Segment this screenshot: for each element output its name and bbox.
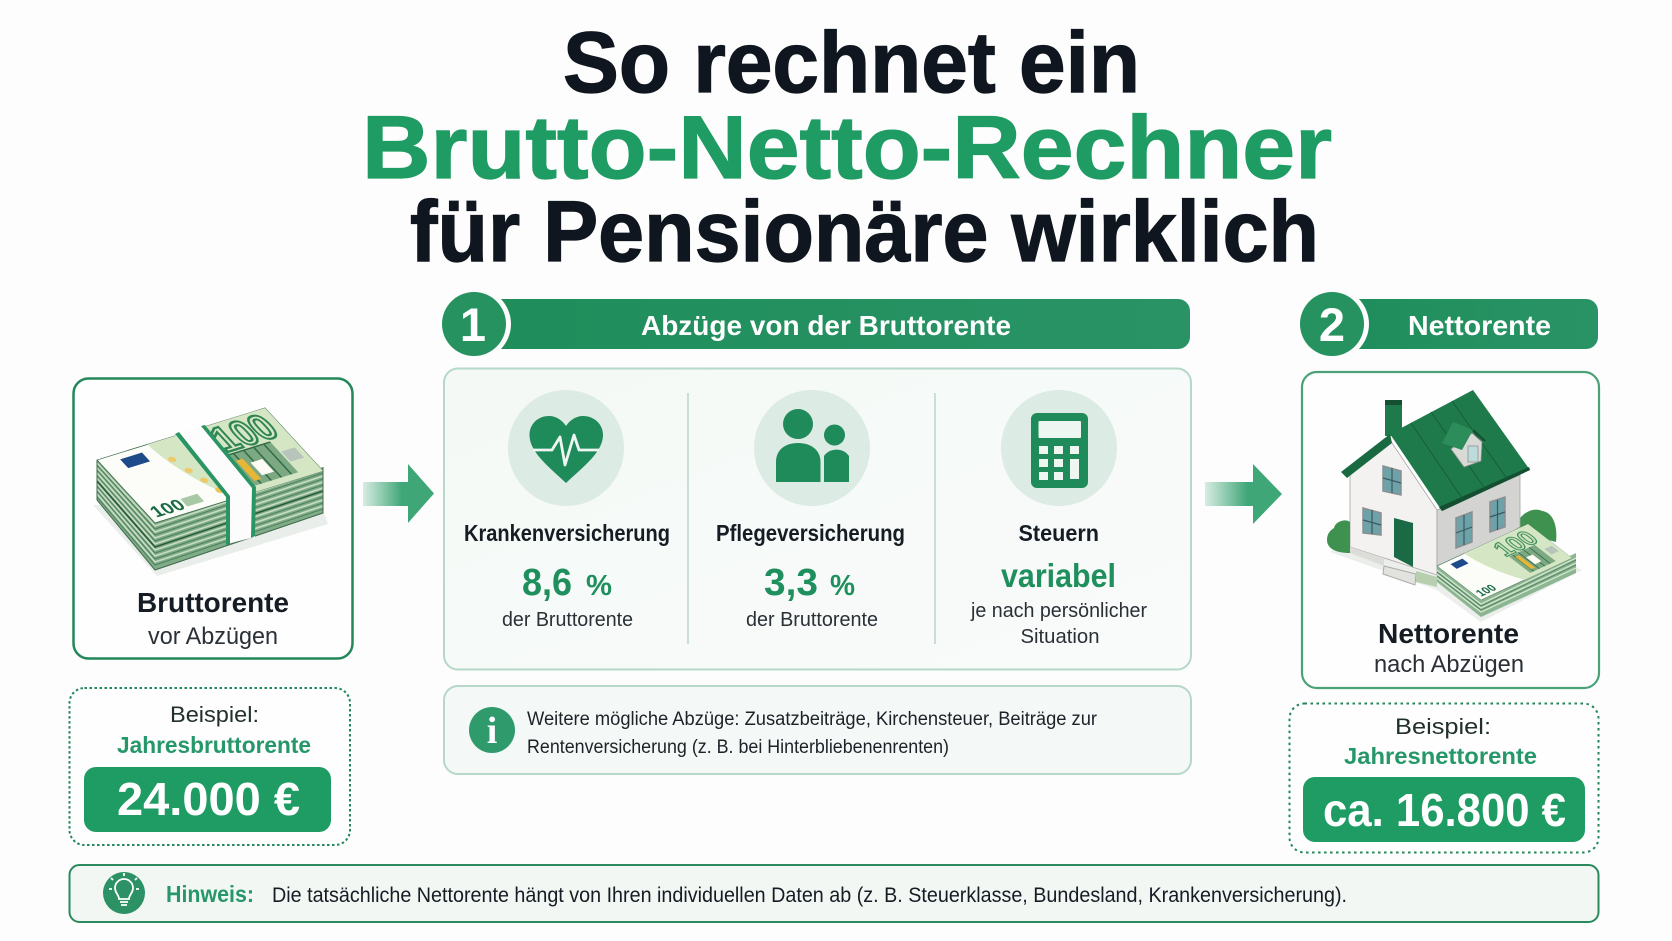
header: step 1: Abzüge von der Bruttorente bbox=[641, 310, 1011, 341]
right bush bbox=[1518, 510, 1556, 542]
panel: Bruttorente card bbox=[74, 378, 352, 658]
heading: Steuern bbox=[1018, 520, 1099, 546]
header: step 1 bbox=[439, 288, 1190, 360]
icon: info: i bbox=[487, 710, 497, 752]
card subheading: vor Abzügen bbox=[148, 623, 278, 650]
icon: light bulb bbox=[103, 872, 145, 914]
icon: heart with pulse bbox=[508, 390, 624, 506]
paper band bbox=[175, 425, 256, 545]
arrow: to deductions bbox=[363, 464, 434, 523]
note text bbox=[527, 709, 1098, 758]
icon: calculator bbox=[1001, 390, 1117, 506]
header: step 2: 2 bbox=[1319, 298, 1345, 351]
caption: Situation bbox=[1020, 626, 1100, 648]
panel: example net pension bbox=[1290, 704, 1598, 852]
column: Pflegeversicherung bbox=[716, 390, 905, 631]
panel: further deductions note bbox=[444, 686, 1191, 774]
bottom note bar bbox=[70, 865, 1598, 922]
value: % bbox=[830, 570, 855, 602]
heading: Krankenversicherung bbox=[464, 520, 670, 546]
label: Hinweis: bbox=[166, 881, 254, 907]
title: So rechnet ein bbox=[563, 15, 1140, 111]
caption: der Bruttorente bbox=[746, 609, 878, 631]
panel: deductions bbox=[444, 368, 1191, 670]
banknote stack: 100 bbox=[1473, 583, 1500, 599]
value bbox=[764, 562, 855, 604]
label: Beispiel: bbox=[170, 702, 259, 727]
banknote stack bbox=[1437, 524, 1576, 617]
title: für Pensionäre wirklich bbox=[410, 184, 1319, 280]
illustration: stack of euro banknotes bbox=[93, 406, 328, 576]
header: step 2: Nettorente bbox=[1408, 310, 1551, 341]
arrow: to net pension bbox=[1205, 464, 1282, 524]
caption: je nach persönlicher bbox=[970, 600, 1147, 622]
note text: Weitere mögliche Abzüge: Zusatzbeiträge, Kirchensteuer, Beiträge zur bbox=[527, 709, 1098, 730]
label: Beispiel: bbox=[1395, 714, 1491, 739]
value: % bbox=[586, 570, 612, 602]
banknote face: 100 bbox=[201, 408, 288, 460]
illustration: house with banknotes bbox=[1327, 390, 1582, 622]
icon: two people bbox=[754, 390, 870, 506]
card heading: Nettorente bbox=[1378, 618, 1519, 649]
value badge: 24.000 € bbox=[117, 773, 300, 825]
panel: example gross pension bbox=[70, 688, 350, 845]
note text: Die tatsächliche Nettorente hängt von Ihren individuellen Daten ab (z. B. Steuerklasse, Bundesland, Krankenversicherung). bbox=[272, 884, 1347, 907]
heading: Pflegeversicherung bbox=[716, 520, 905, 546]
dormer bbox=[1442, 422, 1485, 467]
banknote face: 100 bbox=[146, 497, 190, 521]
note text: Rentenversicherung (z. B. bei Hinterbliebenenrenten) bbox=[527, 737, 949, 758]
value badge: ca. 16.800 € bbox=[1323, 784, 1566, 836]
green label: Jahresbruttorente bbox=[117, 732, 311, 758]
banknote stack: 100 bbox=[1487, 527, 1545, 561]
foundation and steps bbox=[1350, 547, 1437, 587]
value badge bbox=[84, 767, 331, 832]
title bbox=[362, 15, 1332, 280]
card heading: Bruttorente bbox=[137, 587, 289, 618]
green label: Jahresnettorente bbox=[1344, 743, 1537, 769]
roof bbox=[1341, 390, 1530, 511]
caption: der Bruttorente bbox=[502, 609, 633, 631]
header: step 1: 1 bbox=[460, 298, 486, 351]
title: Brutto-Netto-Rechner bbox=[362, 97, 1332, 197]
column: Steuern bbox=[970, 390, 1147, 648]
card subheading: nach Abzügen bbox=[1374, 651, 1524, 678]
windows and door bbox=[1363, 466, 1505, 567]
panel: Nettorente card bbox=[1302, 372, 1599, 688]
icon: info bbox=[469, 707, 515, 753]
chimney bbox=[1385, 400, 1402, 436]
value: 8,6 bbox=[522, 562, 572, 604]
left bush bbox=[1327, 520, 1350, 553]
value: variabel bbox=[1001, 557, 1116, 594]
header: step 2 bbox=[1297, 288, 1598, 360]
value bbox=[522, 562, 612, 604]
column: Krankenversicherung bbox=[464, 390, 670, 631]
value: 3,3 bbox=[764, 562, 818, 604]
caption bbox=[970, 600, 1147, 648]
banknote face bbox=[95, 406, 323, 523]
